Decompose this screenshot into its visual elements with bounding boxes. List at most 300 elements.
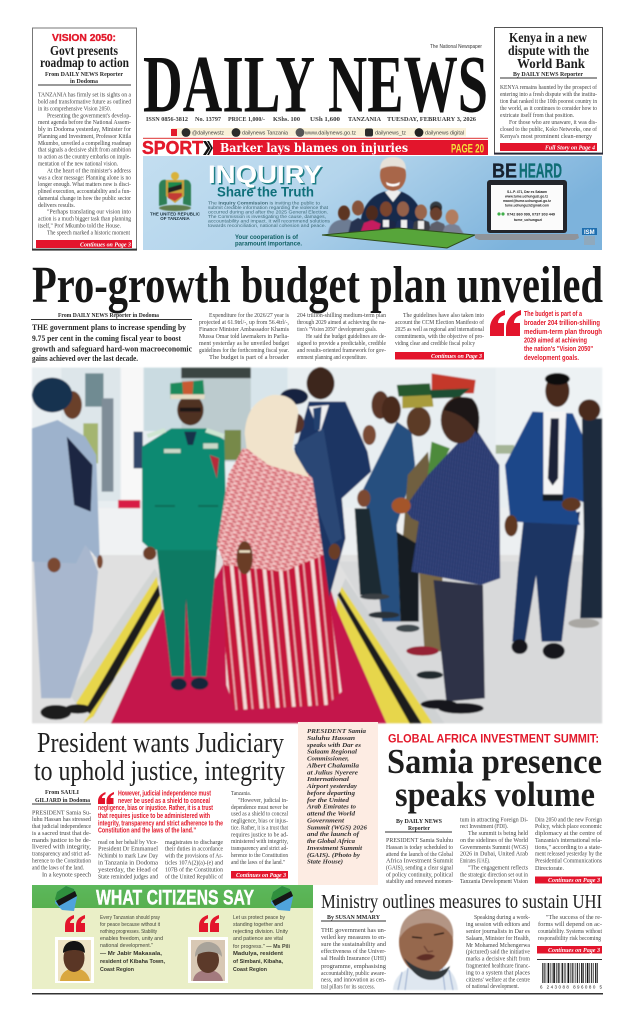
lead intro: growth and safeguard hard-won macroeconomic	[32, 344, 192, 354]
lead column 2	[297, 313, 386, 361]
lead column 2: signed to provide a predictable, credible	[297, 341, 386, 347]
lead column 1	[199, 312, 290, 361]
lead column 1: guidelines for the forthcoming fiscal year.	[199, 347, 289, 354]
story text: closed to the public, Koko Networks, one of	[500, 126, 597, 133]
illustration: commissioners	[328, 157, 465, 236]
panel: photo caption: before departing	[307, 790, 356, 797]
lead column 1: projected at 61.9trl/-, up from 56.4trl/-,	[199, 319, 290, 326]
byline: By SUSAN MMARY	[327, 914, 380, 921]
byline: From DAILY NEWS Reporter	[45, 71, 123, 78]
lead column 3: viding clear and credible fiscal policy	[395, 340, 475, 347]
pull quote: Constitution and the laws of the land."	[98, 826, 196, 834]
Samia column 2: on the sidelines of the World	[460, 837, 528, 844]
judiciary column 1: livered with integrity,	[32, 845, 92, 851]
judiciary column 2: President Dr Emmanuel	[98, 846, 158, 852]
pull quote	[98, 788, 223, 834]
judiciary column 1: and the laws of the land.	[32, 864, 84, 871]
carpet	[111, 565, 387, 723]
lead column 1: Finance Minister Ambassador Khamis	[199, 327, 290, 333]
continues bar: Continues on Page 3	[548, 877, 601, 884]
judiciary column 4: used as a shield to conceal	[231, 812, 288, 818]
panel: photo caption: Albert Chalamila	[306, 762, 360, 769]
sport strip: Barker lays blames on injuries	[220, 141, 408, 155]
Ministry column 2: of national development.	[466, 983, 519, 990]
Samia column 2: Emirates (UAE).	[460, 858, 490, 865]
lead intro: 9.75 per cent in the coming fiscal year to boost	[32, 333, 181, 343]
story text: delivers results.	[38, 203, 76, 209]
text: United Republic: THE UNITED REPUBLIC	[150, 212, 201, 216]
continues bar: Full Story on Page 4	[545, 144, 595, 151]
header band	[32, 885, 313, 908]
panel: photo caption: Government	[307, 817, 345, 824]
judiciary column 4	[231, 791, 288, 866]
Samia column 2: rect Investment (FDI).	[460, 823, 508, 830]
judiciary column 3: 107B of the Constitution	[165, 866, 223, 874]
Ministry column 2: Speaking during a work-	[474, 915, 530, 921]
quote 2: standing together and	[233, 922, 283, 928]
panel: photo caption: PRESIDENT Samia	[307, 728, 367, 735]
quote 2: of Simbani, Kibaha,	[233, 959, 283, 965]
lead column 3: account the CCM Election Manifesto of	[395, 319, 484, 326]
social media row: www.dailynews.go.tz	[304, 131, 356, 137]
story text: extricate itself from that position.	[500, 112, 574, 119]
issue information line: PRICE 1,000/-	[228, 116, 265, 123]
panel: photo caption: the Global Africa	[307, 838, 356, 845]
panel: photo caption: Arab Emirates to	[306, 804, 357, 811]
Ministry column 1: sal Health Insurance (UHI)	[321, 955, 386, 962]
logo: Tanzania agency	[582, 228, 597, 245]
Samia column 3	[535, 817, 603, 872]
Ministry column 2: ing session with editors and	[466, 922, 530, 928]
judiciary column 2: read on her behalf by Vice-	[98, 839, 158, 846]
panel: photo caption: and the launch of	[307, 831, 360, 838]
story text: KENYA remains haunted by the prospect of	[500, 84, 597, 91]
judiciary column 1: that judicial independence	[32, 824, 91, 830]
judiciary column 4: "However, judicial in-	[238, 798, 288, 804]
story text: that signals a decisive shift from ambition	[38, 147, 131, 154]
man in pinstripe suit	[433, 580, 485, 702]
heading: Kenya dispute	[508, 31, 589, 72]
judiciary column 1	[32, 810, 92, 878]
body text: towards reconciliation, national cohesion and peace.	[208, 223, 326, 228]
continues bar	[395, 352, 484, 360]
panel: photo caption: attend the World	[307, 811, 356, 818]
byline	[38, 71, 131, 86]
Ministry column 2: citizens' welfare at the centre	[466, 976, 530, 983]
illustration: green stage	[322, 228, 475, 248]
lead intro	[32, 322, 192, 363]
Ministry column 1: sure the sustainability and	[321, 942, 386, 948]
pull quote: that requires justice to be administered with	[98, 811, 210, 820]
judiciary column 2: Nchimbi to mark Law Day	[98, 854, 158, 860]
panel: photo caption: Suluhu Hassan	[307, 735, 355, 742]
body text: submit credible information regarding the violence that	[208, 205, 329, 210]
Ministry column 1: accountability, public aware-	[321, 971, 386, 977]
Samia column 2	[460, 817, 529, 885]
icon: quotation mark	[199, 915, 219, 932]
Ministry column 2: Mr Mohamed Mchengerwa	[466, 943, 530, 949]
byline: GILJARD in Dodoma	[35, 797, 90, 804]
Samia column 3: ment released yesterday by the	[535, 852, 602, 858]
illustration: laptop with contacts: tume.uchunguzi@gmail.com	[505, 202, 549, 208]
Samia column 2: Governments Summit (WGS)	[460, 844, 528, 851]
Samia column 2: the strategic direction set out in	[460, 872, 528, 878]
row of officials	[362, 422, 415, 622]
stripes left	[69, 568, 160, 703]
social media row	[171, 128, 466, 137]
text: cooperation appeal: Your cooperation is of	[235, 235, 299, 241]
story text: damental change in how the public sector	[38, 196, 131, 202]
story text	[500, 84, 597, 140]
heading: Govt presents roadmap: Govt presents	[50, 43, 118, 58]
quote 2: Coast Region	[233, 967, 267, 973]
lead column 3: commitments, with the objective of pro-	[395, 333, 484, 340]
social media row: dailynews_tz	[375, 131, 406, 137]
Samia column 1: of policy continuity, political	[386, 871, 453, 878]
illustration: laptop with contacts: 0742 860 099, 0737 303 449	[507, 212, 556, 216]
lead column 1: The budget is part of a broader	[209, 354, 289, 361]
social media row: dailynews digital	[425, 131, 464, 137]
lead column 2: 204 trillion-shilling medium-term plan	[297, 313, 386, 319]
judiciary column 4: tice. Rather, it is a trust that	[231, 826, 288, 832]
story text: For those who are unaware, it was dis-	[509, 120, 597, 126]
story text: plined execution, accountability and a fun-	[38, 188, 131, 195]
logo: Tanzania agency: ISM	[584, 230, 595, 236]
judiciary column 3: ticles 107A(2)(a)-(e) and	[165, 860, 223, 866]
judiciary column 4: transparency and strict ad-	[231, 846, 288, 852]
Samia column 3: Dira 2050 and the new Foreign	[535, 817, 602, 823]
lead column 3: The guidelines have also taken into	[403, 313, 484, 319]
Samia column 1: stability and renewed momen-	[386, 879, 453, 885]
story text: Mkumbo, unveiled a compelling roadmap	[38, 141, 131, 147]
issue information line: No. 13797	[195, 116, 221, 123]
judiciary column 2: yesterday, the Head of	[98, 866, 158, 874]
lead column 2: tion's "Vision 2050" development goals.	[297, 327, 377, 333]
issue information line: TUESDAY, FEBRUARY 3, 2026	[387, 116, 476, 123]
quote 1: Every Tanzanian should pray	[100, 915, 160, 921]
chevrons	[203, 141, 213, 155]
byline	[385, 818, 452, 832]
judiciary column 3: of the United Republic of	[165, 873, 223, 880]
headline: Samia presence speaks volume: Samia presence	[387, 742, 602, 781]
issue information line: KShs. 100	[273, 116, 300, 123]
panel: photo caption: at Julius Nyerere	[307, 769, 358, 776]
Samia column 3: Directorate.	[535, 866, 565, 872]
portrait: Minister Mchengerwa	[393, 909, 458, 990]
quote 1: resident of Kibaha Town,	[100, 959, 165, 965]
lead column 2: through 2029 aimed at achieving the na-	[297, 320, 386, 326]
illustration: laptop with contacts: maoni@tume.uchunguzi.go.tz	[503, 198, 551, 203]
headline: Samia presence speaks volume	[387, 742, 602, 814]
judiciary column 4: negligence, bias or injus-	[231, 819, 288, 825]
quote 1	[100, 915, 165, 973]
Ministry column 3: "The success of the re-	[546, 914, 602, 921]
lead intro: THE government plans to increase spending by	[32, 322, 187, 332]
Ministry column 1: THE government has un-	[321, 928, 386, 934]
story text: At the heart of the minister's address	[47, 167, 132, 174]
judiciary column 3: magistrates to discharge	[165, 840, 223, 846]
judiciary column 3: with the provisions of Ar-	[165, 852, 223, 860]
continues bar: Continues on Page 3	[431, 353, 483, 360]
heading: Kenya dispute: World Bank	[517, 57, 585, 72]
judiciary column 4: dependence must never be	[231, 805, 288, 811]
headline: President wants Judiciary: to uphold justice, integrity	[34, 755, 285, 787]
byline: By DAILY NEWS Reporter	[513, 71, 583, 78]
byline: in Dodoma	[70, 78, 98, 85]
judiciary column 4: ministered with integrity,	[231, 839, 288, 845]
quote 1: nothing progresses. Stability	[100, 929, 157, 935]
Ministry column 1: effectiveness of the Univer-	[321, 948, 386, 955]
text: cooperation appeal	[235, 235, 302, 248]
building	[32, 368, 602, 508]
panel: photo caption: (GAIS). (Photo by	[307, 852, 360, 859]
Ministry column 3: responsibility risk becoming	[538, 936, 601, 942]
judiciary column 4: requires justice to be ad-	[231, 832, 288, 838]
continues bar: Continues on Page 3	[236, 872, 287, 879]
lead column 2: ernment planning and expenditure.	[297, 355, 367, 361]
pull quote: development goals.	[524, 353, 579, 362]
story text: mentation of the new national vision.	[38, 160, 118, 168]
masthead: DAILY NEWS: NEWS	[328, 38, 488, 130]
icon: quotation mark	[65, 915, 85, 932]
Ministry column 2: ing to a system that places	[466, 970, 531, 976]
social media row: dailynews Tanzania	[242, 131, 288, 137]
Ministry column 2	[466, 915, 531, 990]
heading: Govt presents roadmap: roadmap to action	[40, 55, 129, 70]
panel: photo caption: State House)	[307, 859, 343, 866]
lead intro: gains achieved over the last decade.	[32, 353, 138, 363]
text: United Republic	[150, 212, 201, 221]
continues bar: Continues on Page 3	[548, 947, 601, 954]
lead column 2: He said the budget guidelines are de-	[306, 334, 386, 340]
woman left	[34, 538, 98, 698]
Samia column 1: Hassan is today scheduled to	[386, 845, 453, 851]
byline: From SAULI	[45, 789, 80, 796]
portrait: Jabir Makasala	[55, 937, 94, 983]
judiciary column 2: State reminded judges and	[98, 874, 158, 880]
issue information line: USh 1,600	[310, 116, 340, 123]
Ministry column 3: countability. Systems without	[538, 929, 602, 935]
Samia column 2: The summit is being held	[468, 831, 528, 837]
quote 2: and patience are vital	[233, 936, 283, 942]
photo: President at the airport	[32, 367, 602, 723]
background people left	[83, 423, 98, 463]
judiciary column 1: transparency and strict ad-	[32, 852, 91, 858]
Samia column 3: tions," according to a state-	[535, 845, 602, 851]
judiciary column 1: is a sacred trust that de-	[32, 831, 91, 837]
judiciary column 4: herence to the Constitution	[231, 853, 288, 859]
portrait: Pili Madulya	[188, 937, 228, 983]
quote 2	[233, 915, 290, 973]
right man	[512, 512, 580, 642]
story text: Planning and Investment, Professor Kitila	[38, 133, 131, 140]
judiciary column 1: In a keynote speech	[42, 872, 91, 878]
Samia column 1	[386, 838, 453, 885]
quote 2: rejecting division. Unity	[233, 929, 288, 935]
Samia column 3: Tanzania's international rela-	[535, 838, 602, 844]
panel: photo caption: Commissioner,	[307, 756, 349, 762]
lead byline: From DAILY NEWS Reporter in Dodoma	[58, 312, 159, 319]
story text: bold and transformative future as outlined	[38, 99, 131, 106]
story text: entering into a fresh dispute with the institu-	[500, 91, 597, 98]
quote 1: Coast Region	[100, 967, 134, 973]
heading: BE HEARD: HEARD	[519, 160, 562, 182]
Samia column 1: attend the launch of the Global	[386, 851, 453, 858]
panel: What Citizens Say	[32, 885, 313, 989]
panel: Inquiry Commission advert	[143, 156, 602, 250]
Ministry column 2: (pictured) said the initiative	[466, 949, 530, 956]
Ministry column 1: tral pillars for its success.	[321, 984, 375, 990]
heading: BE HEARD	[492, 160, 562, 182]
Ministry column 2: senior journalists in Dar es	[466, 929, 531, 935]
story text: was a clear message: Planning alone is no	[38, 175, 131, 181]
man behind president	[294, 402, 371, 605]
sport strip: PAGE 20	[451, 144, 484, 156]
judiciary column 1: PRESIDENT Samia Su-	[32, 810, 91, 816]
lead column 3	[395, 313, 484, 347]
Samia column 2: "The engagement reflects	[468, 864, 529, 871]
quote 1: enables freedom, unity and	[100, 936, 163, 942]
lead column 1: Expenditure for the 2026/27 year is	[209, 312, 290, 319]
issue information line	[146, 116, 476, 123]
heading: Govt presents roadmap	[40, 43, 129, 70]
illustration: laptop with contacts: www.tume.uchunguzi.go.tz	[504, 194, 548, 198]
barcode	[540, 973, 602, 990]
icon: YouTube	[415, 128, 423, 137]
illustration: laptop with contacts	[475, 180, 579, 240]
body text	[208, 200, 330, 228]
Samia column 3: Presidential Communications	[535, 859, 603, 865]
icon: red quotation mark	[490, 310, 521, 336]
Ministry column 3: forms will depend on ac-	[538, 921, 602, 928]
Ministry column 1: ness, and innovation as cen-	[321, 978, 386, 984]
continues bar	[36, 240, 132, 248]
president dress	[223, 552, 342, 710]
pull quote: broader 204 trillion-shilling	[524, 318, 600, 327]
panel: photo caption: Airport yesterday	[306, 783, 357, 790]
story text: ment agenda before the National Assem-	[38, 119, 131, 126]
panel: Kenya teaser	[494, 28, 603, 155]
quote 2: Madulya, resident	[233, 951, 283, 957]
heading: BE HEARD: BE	[492, 160, 517, 182]
pull quote: negligence, bias or injustice. Rather, it is a trust	[98, 803, 213, 812]
byline: Reporter	[408, 825, 430, 832]
quote 1: national development."	[100, 943, 153, 949]
story text: "Perhaps translating our vision into	[47, 210, 131, 216]
ground	[32, 555, 602, 723]
text: cooperation appeal: paramount importance.	[235, 242, 302, 248]
heading: INQUIRY: INQUIRY	[208, 161, 322, 189]
story text: longer enough. What matters now is disci-	[38, 182, 131, 188]
issue information line: ISSN 0856-3812	[146, 116, 188, 123]
sport strip: SPORT	[142, 138, 203, 158]
pull quote: integrity, transparency and strict adherence to the	[98, 818, 223, 828]
issue information line: TANZANIA	[348, 116, 382, 123]
tagline: The National Newspaper	[430, 44, 482, 50]
panel: photo caption: Salaam Regional	[307, 749, 357, 756]
body text: The Inquiry Commission is inviting the public to	[208, 200, 321, 206]
Ministry column 2: Salaam, Minister for Health,	[466, 935, 531, 942]
body text: The Commission is investigating the cause, damages,	[208, 214, 326, 219]
story text: Kenya's most prominent clean-energy	[500, 134, 592, 140]
story text: in its comprehensive Vision 2050.	[38, 106, 111, 112]
icon: Tanzania map left	[55, 886, 77, 911]
pull quote: 2029 aimed at achieving	[524, 336, 587, 344]
Ministry column 1: programme, emphasising	[321, 964, 386, 970]
judiciary column 4: and the laws of the land."	[231, 859, 286, 866]
heading: INQUIRY: INQUIRY	[210, 162, 324, 190]
story text: bly in Dodoma yesterday, Minister for	[38, 126, 131, 133]
lead column 3: 2025 as well as regional and international	[395, 327, 484, 333]
icon: coat of arms	[159, 172, 191, 211]
social media row: @dailynewstz	[192, 131, 224, 137]
quote 2: Let us protect peace by	[233, 915, 285, 921]
Samia column 2: Tanzania Development Vision	[460, 879, 528, 885]
body text: occurred during and after the 2025 General Election.	[208, 210, 328, 214]
Samia column 3: diplomacy at the centre of	[535, 830, 602, 837]
panel: Vision 2050 teaser	[32, 28, 137, 251]
body text: accountability and impact. It will recommend solutions	[208, 218, 330, 224]
kicker: Vision 2050: VISION 2050:	[52, 33, 116, 44]
Ministry column 1	[321, 928, 386, 990]
panel: photo caption: Investment Summit	[306, 845, 363, 852]
pull quote: medium-term plan through	[524, 327, 602, 336]
story text: tion that ranked it the 10th poorest country in	[500, 99, 597, 105]
quote 1: for peace because without it	[100, 922, 160, 928]
story text: action is a much bigger task than planning	[38, 216, 131, 222]
icon: X	[182, 128, 190, 137]
pull quote	[524, 309, 602, 362]
icon: Facebook	[232, 128, 240, 137]
Ministry column 3	[538, 914, 602, 942]
Samia column 2: 2026 in Dubai, United Arab	[460, 852, 528, 858]
story text	[38, 92, 132, 236]
sport strip	[142, 138, 488, 158]
lead column 1: ment yesterday as he unveiled budget	[199, 341, 289, 347]
icon: red quotation mark	[98, 792, 114, 804]
judiciary column 3	[165, 840, 223, 880]
Ministry column 2: marks a decisive shift from	[466, 956, 530, 963]
lead column 1: Mussa Omar told lawmakers in Parlia-	[199, 334, 289, 340]
Samia column 2: tum in attracting Foreign Di-	[460, 817, 528, 823]
far right person	[580, 418, 602, 618]
continues bar: Continues on Page 3	[80, 241, 132, 248]
story text: to action as the country embarks on imple-	[38, 155, 131, 161]
subheading: Share the Truth: Share the Truth	[217, 184, 314, 200]
judiciary column 1: herence to the Constitution	[32, 858, 91, 864]
story text: Presenting the government's develop-	[47, 113, 131, 119]
Samia column 1: Africa Investment Summit	[386, 858, 453, 865]
pull quote: never be used as a shield to conceal	[118, 796, 210, 805]
headline: President wants Judiciary: President wants Judiciary	[37, 727, 284, 759]
headline: President wants Judiciary	[34, 727, 285, 787]
pull quote: the nation's "Vision 2050"	[524, 344, 593, 353]
headline: Samia presence speaks volume: speaks volume	[395, 775, 595, 814]
judiciary column 1: luhu Hassan has stressed	[32, 817, 91, 823]
quote 1: — Mr Jabir Makasala,	[100, 951, 162, 957]
story text: TANZANIA has firmly set its sights on a	[38, 92, 131, 99]
illustration: laptop with contacts: tume_uchunguzi	[514, 217, 542, 222]
judiciary column 1: mands justice to be de-	[32, 838, 91, 844]
Samia column 1: PRESIDENT Samia Suluhu	[386, 838, 453, 844]
heading: WHAT CITIZENS SAY	[96, 886, 254, 910]
Samia column 3: Policy, which place economic	[535, 824, 602, 830]
judiciary column 3: their duties in accordance	[165, 846, 223, 852]
pull quote: However, judicial independence must	[118, 788, 211, 798]
icon: Tanzania map right	[271, 886, 293, 911]
heading: Kenya dispute: Kenya in a new	[509, 31, 588, 46]
bottom rule	[32, 993, 603, 994]
